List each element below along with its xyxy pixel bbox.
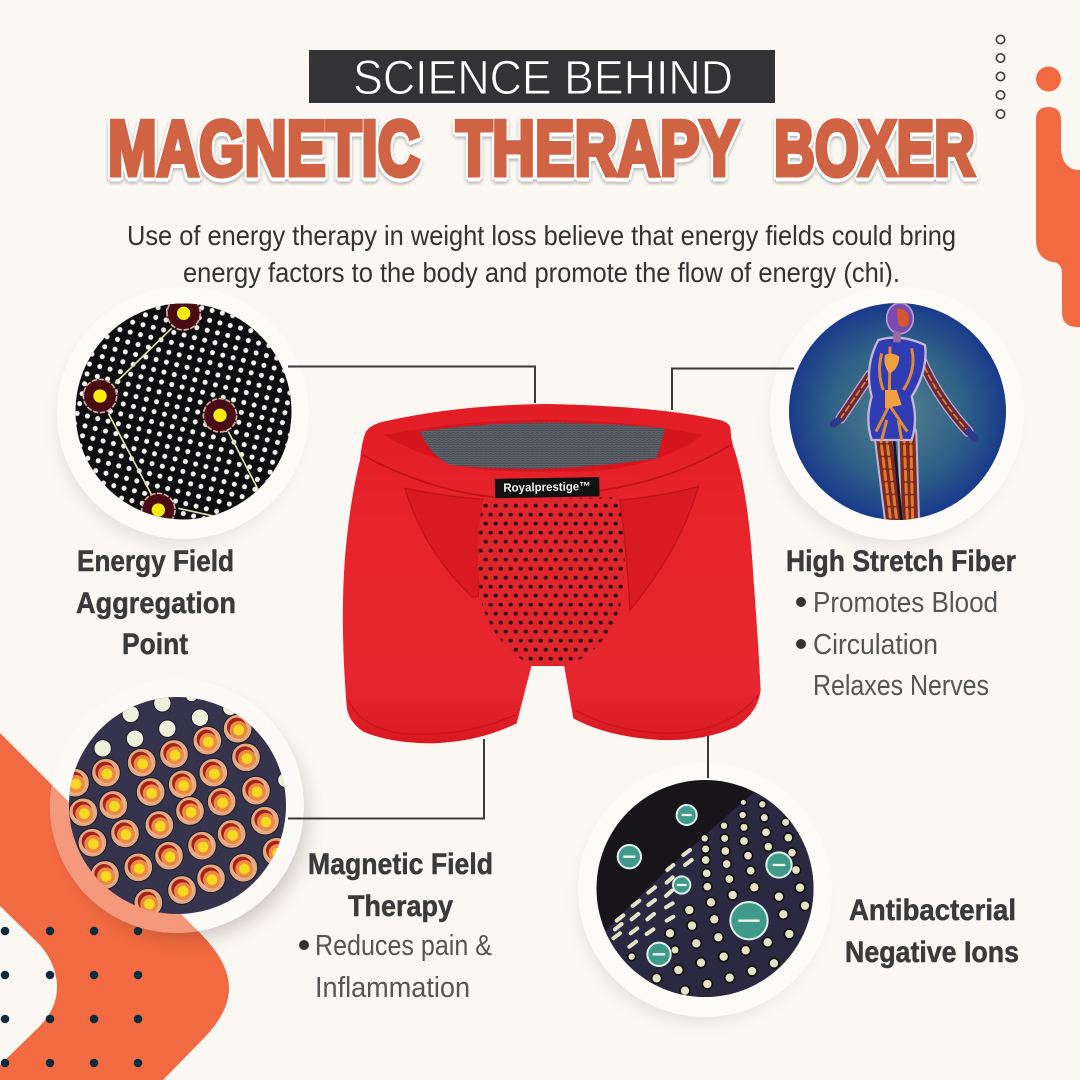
decorative rings column bbox=[996, 35, 1005, 118]
label: magnetic field therapy: Reduces pain & bbox=[315, 930, 492, 962]
title banner: SCIENCE BEHIND bbox=[353, 52, 733, 105]
label: antibacterial negative ions: Negative Ions bbox=[845, 936, 1019, 969]
decorative dot grid bbox=[1, 927, 142, 1067]
intro text: Use of energy therapy in weight loss believe that energy fields could bring bbox=[127, 220, 956, 251]
boxer hem seam bbox=[348, 695, 758, 734]
brand label: Royalprestige™ bbox=[503, 479, 591, 495]
connector lines bbox=[288, 366, 794, 818]
boxer waist opening bbox=[383, 419, 703, 472]
main title: MAGNETIC bbox=[108, 104, 420, 192]
white dots bbox=[94, 697, 284, 788]
product: red boxer bbox=[343, 404, 761, 743]
label: magnetic field therapy: Inflammation bbox=[315, 972, 470, 1004]
compressed dots bbox=[613, 850, 692, 947]
label: energy field aggregation point: Aggregation bbox=[76, 587, 236, 620]
label: high stretch fiber: Relaxes Nerves bbox=[813, 670, 989, 702]
magnets bbox=[61, 714, 291, 917]
side mesh panels bbox=[405, 488, 483, 597]
intro text bbox=[127, 220, 956, 288]
panel: high stretch fiber circle bbox=[770, 286, 1024, 543]
panel: negative ions circle bbox=[578, 780, 814, 1024]
decorative orange shape: bottom left bbox=[0, 733, 229, 1080]
label: high stretch fiber: High Stretch Fiber bbox=[786, 545, 1016, 578]
panel: energy field circle bbox=[56, 304, 292, 547]
inner grey panel bbox=[420, 423, 665, 469]
label: magnetic field therapy bbox=[299, 848, 493, 1004]
cream dots bbox=[628, 799, 810, 996]
label: high stretch fiber: Circulation bbox=[813, 629, 938, 661]
label: magnetic field therapy: Magnetic Field bbox=[308, 848, 493, 881]
main title: THERAPY bbox=[456, 104, 739, 192]
boxer body bbox=[343, 404, 761, 743]
label: magnetic field therapy: Therapy bbox=[348, 890, 453, 923]
intro text: energy factors to the body and promote the flow of energy (chi). bbox=[183, 257, 900, 288]
decorative orange shape: top right bbox=[1036, 66, 1080, 327]
main title: BOXER bbox=[774, 104, 975, 192]
ion bubbles bbox=[618, 805, 792, 966]
label: energy field aggregation point: Point bbox=[122, 628, 188, 661]
label: high stretch fiber bbox=[786, 545, 1016, 702]
label: high stretch fiber: Promotes Blood bbox=[813, 587, 998, 619]
label: energy field aggregation point bbox=[76, 545, 236, 661]
main title bbox=[108, 104, 975, 192]
label: antibacterial negative ions: Antibacterial bbox=[849, 894, 1016, 927]
magnet panel bbox=[478, 497, 625, 666]
label: antibacterial negative ions bbox=[845, 894, 1019, 969]
brand label bbox=[495, 477, 599, 498]
waistband seam bbox=[363, 445, 731, 497]
human body figure bbox=[833, 358, 975, 520]
label: energy field aggregation point: Energy Field bbox=[77, 545, 234, 578]
panel: magnetic field circle bbox=[50, 697, 316, 946]
